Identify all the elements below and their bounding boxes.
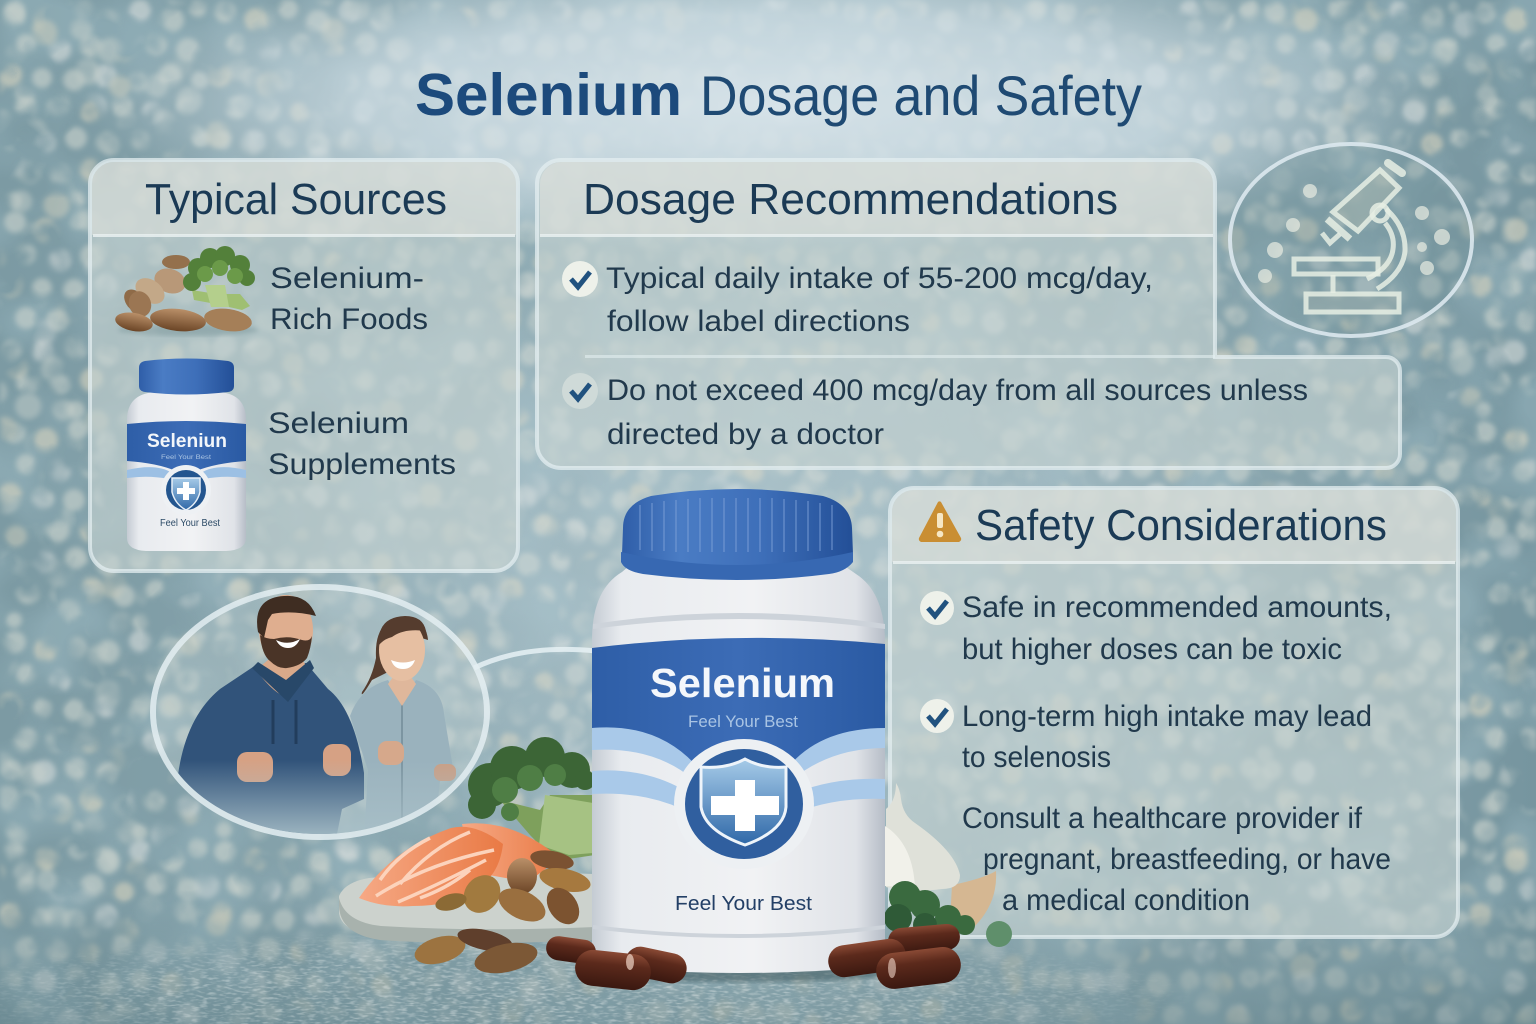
broccoli: [468, 737, 595, 861]
safety text 2: to selenosis: [962, 741, 1111, 774]
icon: check 1: [562, 261, 598, 297]
safety text 3: [962, 802, 1391, 917]
dosage text 1: [606, 262, 1153, 338]
label: [592, 638, 885, 776]
heading: typical sources: Typical Sources: [145, 175, 447, 224]
capsules left: [545, 935, 689, 992]
icon: small supplement bottle: Feel Your Best: [161, 455, 211, 461]
illustration: joggers in circle: [150, 587, 490, 849]
icon: check 4: [920, 699, 954, 733]
bowl: [950, 871, 996, 927]
connector arc: [474, 649, 596, 668]
heading: dosage recommendations: Dosage Recommendations: [583, 175, 1118, 224]
icon: small supplement bottle: [127, 358, 246, 551]
title: [415, 62, 1142, 128]
dosage text 1: follow label directions: [607, 305, 910, 338]
title: Dosage and Safety: [700, 64, 1142, 127]
safety text 1: [962, 591, 1392, 666]
sources text: Supplements: [268, 448, 456, 481]
safety text 1: but higher doses can be toxic: [962, 633, 1342, 666]
safety text 3: Consult a healthcare provider if: [962, 802, 1363, 835]
dosage text 2: directed by a doctor: [607, 418, 884, 451]
icon: microscope badge: [1230, 144, 1472, 336]
illustration: main supplement bottle: Feel Your Best: [675, 893, 812, 915]
sources text: [268, 262, 456, 481]
dosage text 1: Typical daily intake of 55-200 mcg/day,: [606, 262, 1153, 295]
sources text: Selenium-: [270, 262, 424, 295]
safety text 1: Safe in recommended amounts,: [962, 591, 1392, 624]
sources text: Rich Foods: [270, 303, 428, 336]
sources text: Selenium: [268, 407, 409, 440]
panel: typical sources: [90, 160, 518, 571]
icon: warning triangle: [919, 501, 961, 542]
dosage text 2: Do not exceed 400 mcg/day from all sources unless: [607, 374, 1308, 407]
illustration: main supplement bottle: [578, 489, 898, 982]
icon: nuts and broccoli: [114, 246, 258, 336]
salmon: [359, 823, 560, 906]
shield badge: [674, 739, 814, 869]
dosage text 2: [607, 374, 1308, 451]
panel: dosage recommendations: [537, 160, 1400, 468]
bottle text: Selenium: [650, 660, 835, 706]
icon: small supplement bottle: Seleniun: [147, 431, 227, 452]
icon: check 2: [562, 373, 598, 409]
safety text 3: a medical condition: [1002, 884, 1250, 917]
wood board: [339, 873, 595, 939]
illustration: main supplement bottle: Feel Your Best: [688, 712, 798, 731]
illustration: food group left: [339, 737, 595, 978]
safety text 2: Long-term high intake may lead: [962, 700, 1372, 733]
icon: check 3: [920, 591, 954, 625]
capsules right: [826, 923, 963, 991]
heading: safety considerations: Safety Considerations: [975, 501, 1387, 550]
nuts: [412, 847, 593, 978]
greens: [884, 881, 1012, 947]
safety text 3: pregnant, breastfeeding, or have: [983, 843, 1391, 876]
garlic: [885, 783, 960, 891]
safety text 2: [962, 700, 1372, 774]
icon: small supplement bottle: Feel Your Best: [160, 518, 220, 529]
man: [178, 595, 364, 849]
illustration: food group right: [884, 783, 1012, 947]
title: Selenium: [415, 62, 682, 128]
woman: [350, 616, 456, 840]
panel: safety considerations: [890, 488, 1458, 937]
